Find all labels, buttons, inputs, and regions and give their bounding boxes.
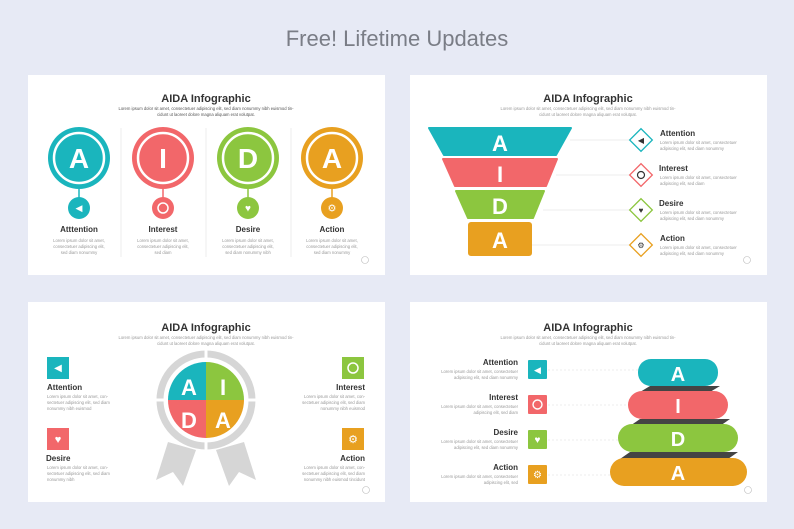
item: attention: sectetuer adipiscing elit, sed diam	[47, 400, 110, 405]
list: diamonds with labels: Desire	[659, 199, 684, 208]
slide title: AIDA Infographic	[161, 322, 251, 334]
item: interest	[302, 357, 366, 411]
slide title: cidunt ut laoreet dolore magna aliquam erat volutpat.	[539, 112, 637, 117]
list: labels with icons: adipiscing elit, sed diam nonummy	[454, 375, 519, 380]
item: desire circle: D	[238, 143, 258, 174]
list: labels with icons: Interest	[489, 393, 518, 402]
slide title: cidunt ut laoreet dolore magna aliquam erat volutpat.	[157, 112, 255, 117]
list: diamonds with labels: Interest	[659, 164, 688, 173]
list: diamonds with labels: Action	[660, 234, 685, 243]
list: diamonds with labels: Lorem ipsum dolor sit amet, consectetuer	[660, 175, 737, 180]
list: diamonds with labels: Lorem ipsum dolor sit amet, consectetuer	[660, 245, 737, 250]
stacked pills chart: A	[671, 364, 685, 386]
item: action circle	[301, 127, 363, 255]
item: action: ⚙	[348, 434, 358, 446]
item: interest: sectetuer adipiscing elit, sed diam	[302, 400, 365, 405]
item: action circle: consectetuer adipiscing elit,	[306, 244, 358, 249]
panel: stacked pills slide	[410, 302, 767, 502]
slide title: AIDA Infographic	[543, 93, 633, 105]
item: attention circle: ◀	[76, 203, 83, 213]
badge chart	[156, 350, 256, 486]
item: attention circle: Lorem ipsum dolor sit amet,	[53, 238, 105, 243]
list: labels with icons: adipiscing elit, sed diam	[474, 410, 519, 415]
item: interest circle: I	[159, 143, 167, 174]
slide title: Lorem ipsum dolor sit amet, consectetuer adipiscing elit, sed diam nonummy nibh euismod tin-	[118, 335, 294, 340]
badge chart: I	[220, 375, 226, 400]
slide title: Lorem ipsum dolor sit amet, consectetuer adipiscing elit, sed diam nonummy nibh euismod tin-	[500, 335, 676, 340]
item: attention circle: A	[69, 143, 89, 174]
list: labels with icons: Action	[493, 463, 518, 472]
item: desire: Lorem ipsum dolor sit amet, con-	[47, 465, 109, 470]
slide title: cidunt ut laoreet dolore magna aliquam erat volutpat.	[157, 341, 255, 346]
panel: circles slide	[28, 75, 385, 275]
stacked pills chart: D	[671, 429, 685, 451]
item: interest circle: Interest	[149, 225, 178, 234]
item: attention: Lorem ipsum dolor sit amet, con-	[47, 394, 109, 399]
list: labels with icons: ◀	[534, 365, 541, 375]
item: desire circle: consectetuer adipiscing elit,	[222, 244, 274, 249]
item: attention circle: consectetuer adipiscing elit,	[53, 244, 105, 249]
item: interest: Interest	[336, 383, 365, 392]
item: desire	[46, 428, 110, 482]
item: desire: ♥	[55, 434, 61, 446]
item: desire: Desire	[46, 454, 71, 463]
funnel chart: A	[492, 228, 508, 253]
stacked pills chart	[610, 359, 747, 486]
item: attention circle: Atttention	[60, 225, 98, 234]
slide title: Lorem ipsum dolor sit amet, consectetuer adipiscing elit, sed diam nonummy nibh euismod tin-	[118, 106, 294, 111]
item: interest circle: consectetuer adipiscing elit,	[137, 244, 189, 249]
badge chart: A	[215, 408, 231, 433]
item: attention	[47, 357, 110, 411]
item: attention circle: sed diam nonummy	[61, 250, 98, 255]
funnel chart: I	[497, 162, 503, 187]
item: interest circle: sed diam	[154, 250, 172, 255]
item: attention: Attention	[47, 383, 82, 392]
list: diamonds with labels: adipiscing elit, sed diam nonummy	[660, 251, 725, 256]
list: diamonds with labels: Lorem ipsum dolor sit amet, consectetuer	[660, 210, 737, 215]
list: diamonds with labels: adipiscing elit, sed diam nonummy	[660, 216, 725, 221]
slide title	[500, 322, 676, 346]
list: diamonds with labels: ⚙	[637, 241, 645, 250]
item: interest: nonummy nibh euismod	[321, 406, 366, 411]
list: diamonds with labels: ♥	[639, 206, 644, 215]
slide title: Lorem ipsum dolor sit amet, consectetuer adipiscing elit, sed diam nonummy nibh euismod tin-	[500, 106, 676, 111]
item: action	[302, 428, 366, 482]
item: desire circle: ♥	[245, 204, 251, 214]
stacked pills chart: I	[675, 396, 681, 418]
slide title	[500, 93, 676, 117]
item: desire circle: sed diam nonummy nibh	[225, 250, 271, 255]
item: action circle: Lorem ipsum dolor sit amet,	[306, 238, 358, 243]
list: labels with icons: Desire	[494, 428, 519, 437]
item: action: nonummy nibh euismod tincidunt	[304, 477, 366, 482]
item: attention: ◀	[54, 363, 62, 374]
item: action circle: A	[322, 143, 342, 174]
item: action: Lorem ipsum dolor sit amet, con-	[304, 465, 366, 470]
list: labels with icons: adipiscing elit, sed	[484, 480, 519, 485]
item: desire circle: Lorem ipsum dolor sit amet,	[222, 238, 274, 243]
item: interest circle	[132, 127, 194, 255]
list: diamonds with labels: adipiscing elit, sed diam nonummy	[660, 146, 725, 151]
slide title: AIDA Infographic	[161, 93, 251, 105]
item: action: sectetuer adipiscing elit, sed diam	[302, 471, 365, 476]
list: labels with icons: ♥	[535, 435, 541, 446]
badge chart: A	[181, 375, 197, 400]
item: action circle: ⚙	[328, 204, 337, 214]
funnel chart	[429, 128, 571, 256]
list: diamonds with labels	[630, 129, 737, 256]
item: interest circle: Lorem ipsum dolor sit amet,	[137, 238, 189, 243]
list: labels with icons: Lorem ipsum dolor sit amet, consectetuer	[441, 474, 519, 479]
item: action: Action	[340, 454, 365, 463]
list: diamonds with labels: adipiscing elit, sed diam	[660, 181, 705, 186]
item: interest: Lorem ipsum dolor sit amet, con-	[304, 394, 366, 399]
list: labels with icons: adipiscing elit, sed diam nonummy	[454, 445, 519, 450]
funnel chart: A	[492, 131, 508, 156]
list: labels with icons: Lorem ipsum dolor sit amet, consectetuer	[441, 404, 519, 409]
item: attention circle	[48, 127, 110, 255]
list: diamonds with labels: Lorem ipsum dolor sit amet, consectetuer	[660, 140, 737, 145]
item: desire circle	[217, 127, 279, 255]
item: action circle: sed diam nonummy	[314, 250, 351, 255]
list: labels with icons: Attention	[483, 358, 518, 367]
item: action circle: Action	[320, 225, 345, 234]
stacked pills chart: A	[671, 463, 685, 485]
list: labels with icons: Lorem ipsum dolor sit amet, consectetuer	[441, 369, 519, 374]
header title: Free! Lifetime Updates	[286, 26, 508, 51]
panel: funnel slide	[410, 75, 767, 275]
list: labels with icons: ⚙	[533, 470, 542, 481]
list: labels with icons	[441, 358, 547, 485]
slide title	[118, 93, 294, 117]
badge chart: D	[181, 408, 197, 433]
slide title	[118, 322, 294, 346]
panel: badge slide	[28, 302, 385, 502]
item: attention: nonummy nibh euismod	[47, 406, 92, 411]
list: diamonds with labels: ◀	[638, 136, 645, 145]
list: labels with icons: Lorem ipsum dolor sit amet, consectetuer	[441, 439, 519, 444]
item: desire circle: Desire	[236, 225, 261, 234]
slide title: cidunt ut laoreet dolore magna aliquam erat volutpat.	[539, 341, 637, 346]
funnel chart: D	[492, 194, 508, 219]
item: desire: nonummy nibh	[47, 477, 75, 482]
item: desire: sectetuer adipiscing elit, sed diam	[47, 471, 110, 476]
slide title: AIDA Infographic	[543, 322, 633, 334]
list: diamonds with labels: Attention	[660, 129, 695, 138]
